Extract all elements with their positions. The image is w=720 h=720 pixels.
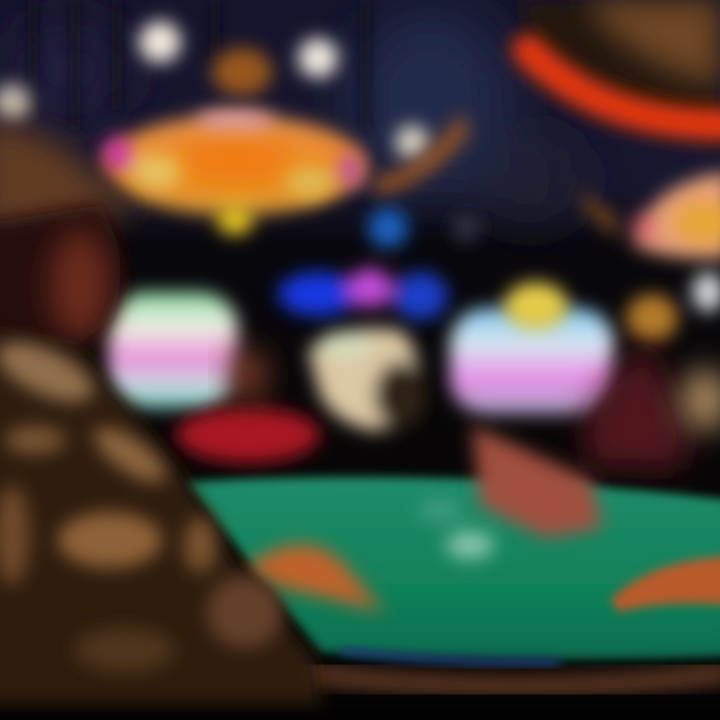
hat top right bbox=[520, 0, 720, 130]
ceiling lights bbox=[0, 21, 480, 242]
right lamp bbox=[575, 172, 720, 259]
table edge bbox=[300, 672, 720, 687]
screen right bbox=[450, 282, 614, 414]
cards on table bbox=[418, 502, 494, 559]
red figure bbox=[176, 347, 320, 463]
blue glow bbox=[278, 208, 448, 320]
screen left bbox=[108, 292, 238, 408]
table blue rim bbox=[340, 650, 560, 662]
left foreground person bbox=[0, 120, 325, 720]
chandelier bbox=[102, 48, 470, 235]
far right figure bbox=[582, 272, 720, 470]
dealer arm bbox=[472, 425, 602, 538]
green table bbox=[185, 477, 720, 659]
bottom shadow bbox=[0, 705, 720, 720]
hand center bbox=[245, 544, 385, 612]
screen center bbox=[308, 328, 426, 432]
hand right bbox=[610, 556, 720, 612]
